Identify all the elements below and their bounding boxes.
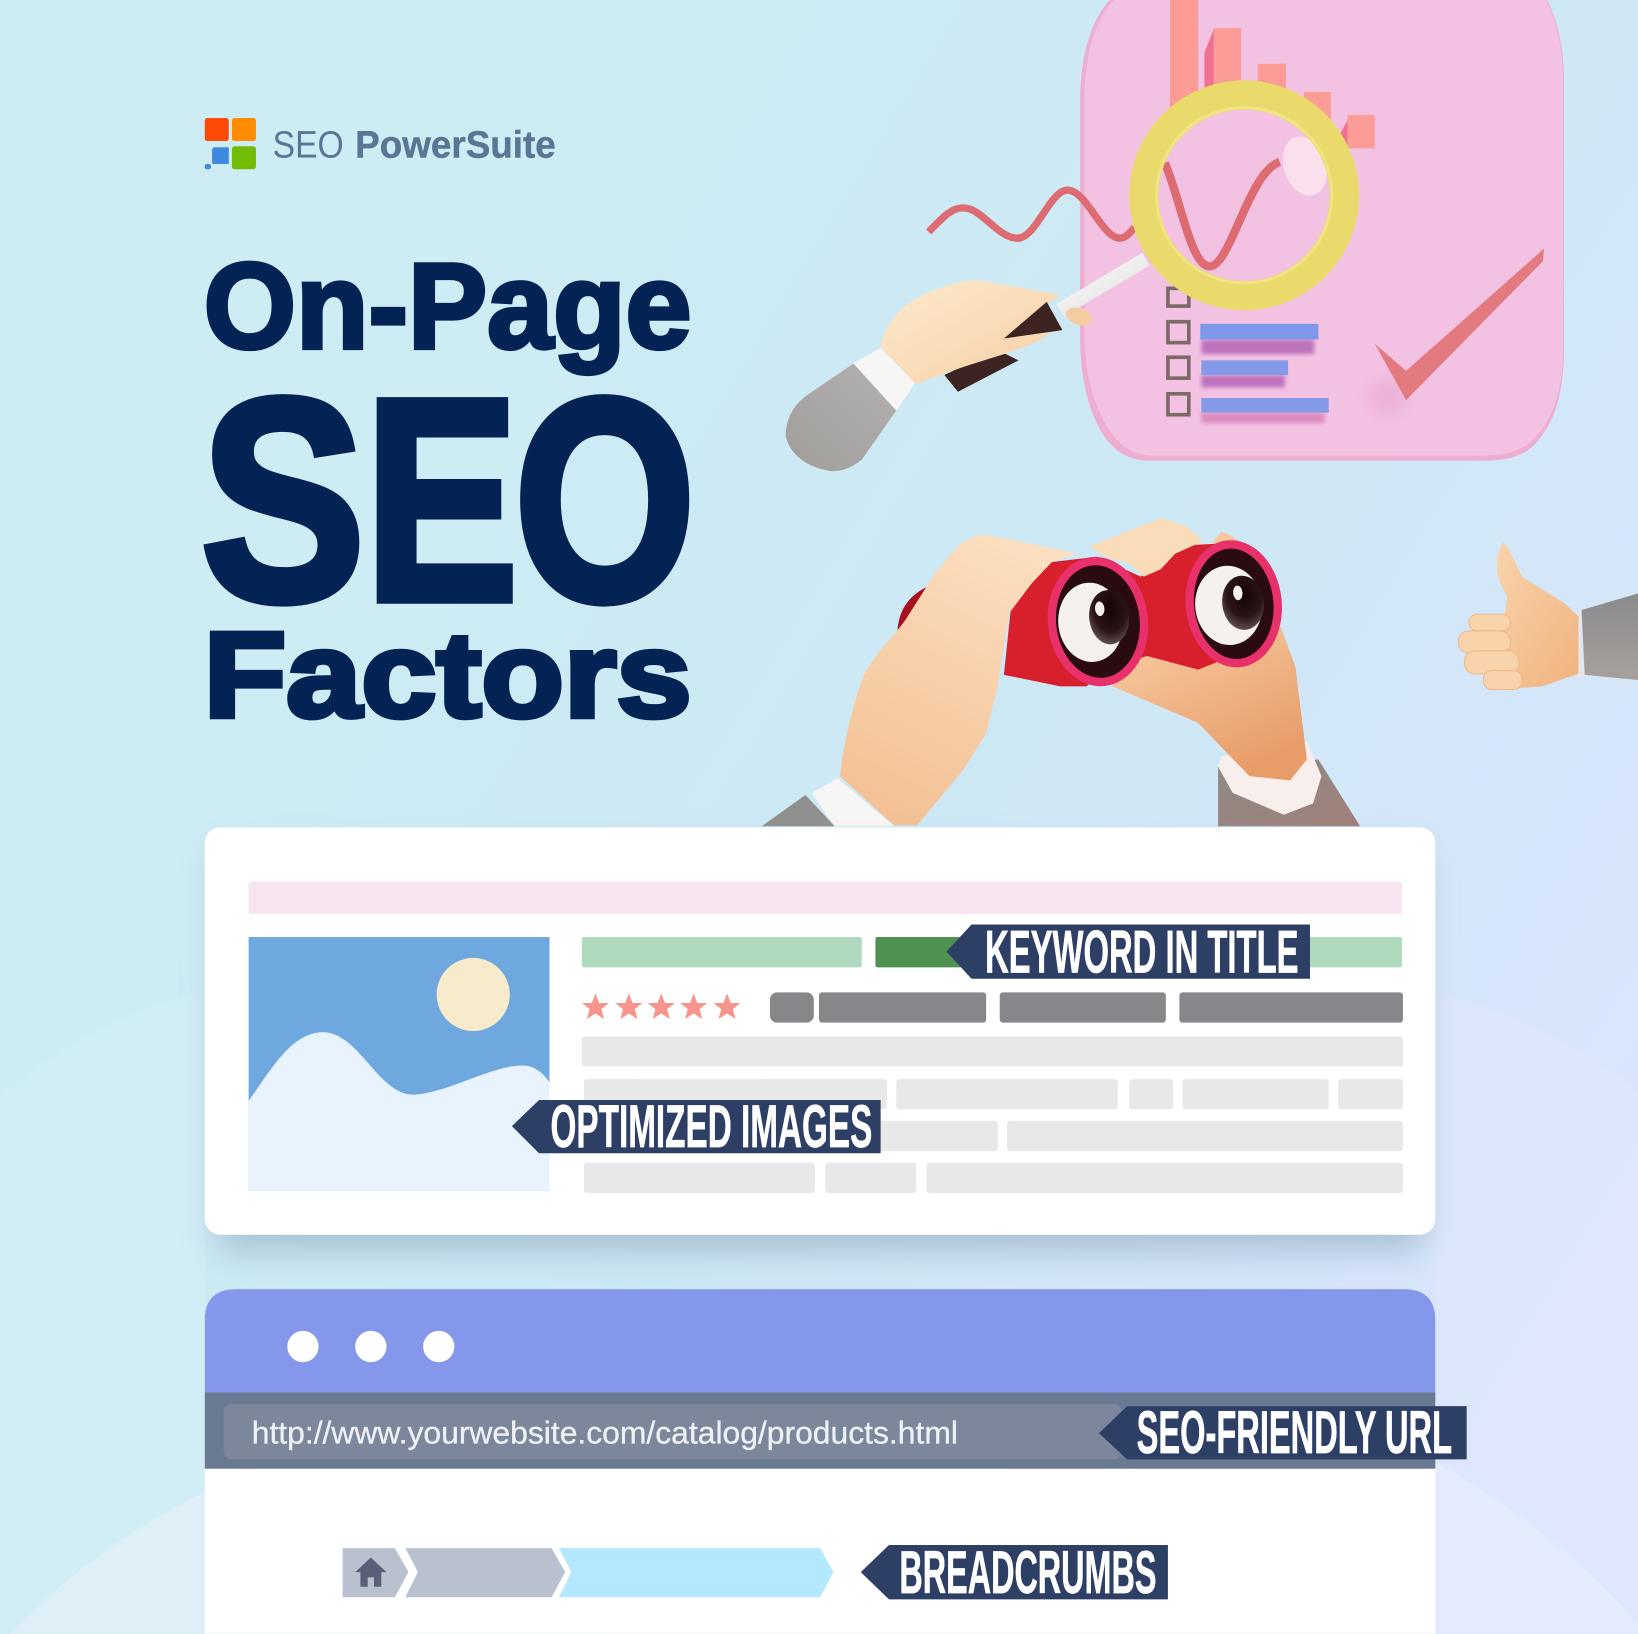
label: keyword in title: KEYWORD IN TITLE: [985, 918, 1298, 986]
checklist: [1168, 288, 1329, 423]
browser window card: [205, 1289, 1467, 1634]
right cuff: [1218, 742, 1321, 815]
label: optimized images: [512, 1092, 881, 1160]
fingers: [1458, 614, 1522, 689]
dark cap: [897, 587, 927, 633]
palm: [881, 280, 1060, 384]
thumbs up hand: [1458, 542, 1638, 690]
image placeholder: [249, 937, 549, 1191]
trend line: [929, 190, 1134, 238]
sleeve: [786, 364, 896, 471]
binoculars and hands: [762, 518, 1360, 826]
right eyepiece: [1179, 535, 1288, 672]
grip: [1004, 302, 1062, 338]
pink report board: [1080, 0, 1564, 461]
barrel: [1004, 543, 1254, 686]
breadcrumbs: [343, 1548, 834, 1597]
thumb and palm: [1490, 542, 1578, 690]
knuckles over barrel: [1090, 518, 1203, 577]
fingertip: [1063, 304, 1095, 329]
brand logo: [205, 118, 556, 169]
bar chart: [1170, 0, 1375, 148]
description placeholder lines: [582, 1036, 1403, 1193]
nub: [1212, 532, 1243, 545]
cuff: [853, 348, 915, 411]
title: Factors: [204, 607, 692, 743]
label: keyword in title: [946, 918, 1310, 986]
address bar: [205, 1392, 1435, 1469]
rating stars: [582, 993, 741, 1019]
right palm: [1107, 627, 1307, 780]
label: seo-friendly url: [1099, 1398, 1467, 1466]
title: S: [201, 339, 365, 661]
label: optimized images: OPTIMIZED IMAGES: [551, 1092, 872, 1160]
browser title bar: [205, 1289, 1435, 1392]
address bar: http://www.yourwebsite.com/catalog/products.html: [252, 1416, 958, 1451]
snippet pink header bar: [249, 882, 1402, 914]
SERP card: [205, 827, 1435, 1254]
lower handle: [944, 350, 1019, 392]
dark meta pills: [770, 992, 1403, 1023]
left cuff: [812, 778, 894, 826]
title: On-Page: [204, 238, 692, 374]
cuff: [1570, 610, 1585, 679]
magnifying glass: [1060, 95, 1344, 310]
title bars: [582, 937, 1402, 967]
left eyepiece: [1041, 552, 1155, 691]
window dots: [287, 1331, 454, 1362]
label: breadcrumbs: BREADCRUMBS: [899, 1538, 1156, 1606]
right sleeve: [1218, 759, 1360, 826]
title: O: [514, 338, 696, 661]
check mark: [1366, 249, 1544, 416]
label: breadcrumbs: [861, 1538, 1168, 1606]
title: [201, 238, 696, 743]
home icon: [355, 1558, 387, 1587]
brand logo: SEO: [273, 124, 344, 166]
sleeve: [1582, 593, 1638, 680]
title: E: [365, 340, 518, 661]
hand holding magnifier: [786, 280, 1095, 471]
left hand: [840, 535, 1078, 825]
brand logo: PowerSuite: [355, 124, 556, 166]
left sleeve: [762, 795, 835, 826]
